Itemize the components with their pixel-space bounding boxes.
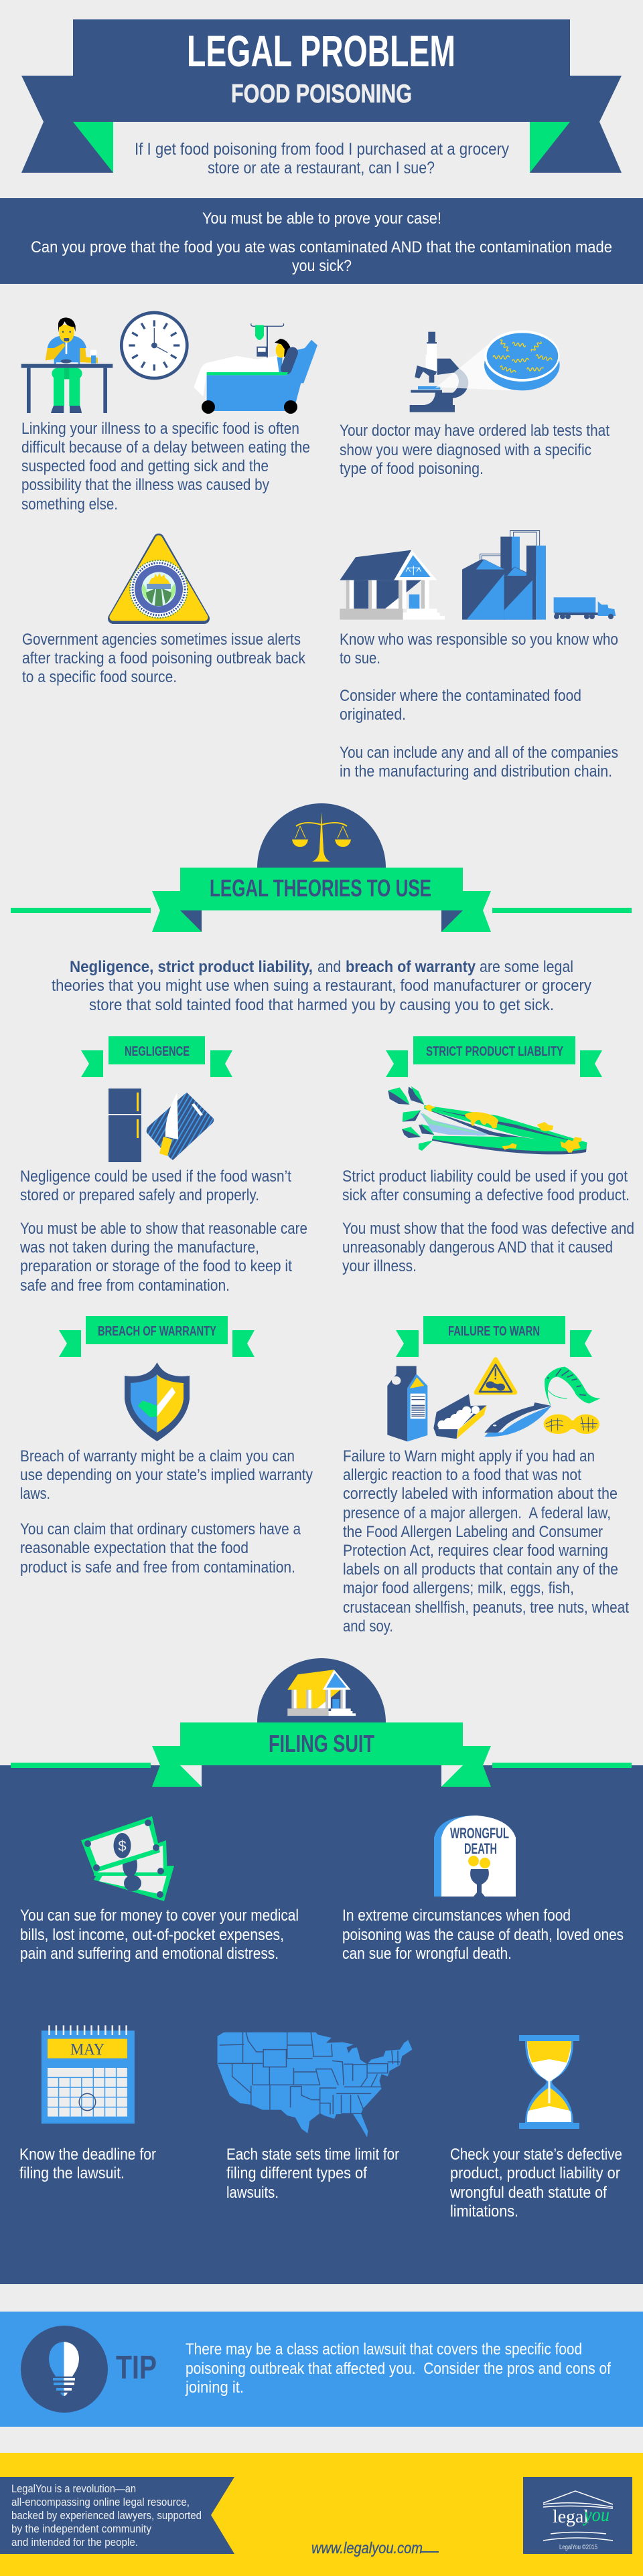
text: lab tests [340, 422, 610, 478]
icon: patient in hospital bed [194, 323, 317, 414]
website url: www.legalyou.com [311, 2539, 423, 2557]
section heading: filing suit [11, 1658, 632, 1787]
text: breach of warranty: use depending on your state’s implied warranty [20, 1466, 313, 1484]
icon: calendar [42, 2025, 135, 2123]
panel: prove your case: you sick? [292, 257, 352, 275]
text: negligence: safe and free from contamination. [20, 1277, 230, 1295]
icon: shield [125, 1362, 190, 1441]
icon: delivery truck [554, 597, 616, 619]
text: failure to warn: allergic reaction to a food that was not [343, 1466, 581, 1484]
ribbon: breach of warranty [59, 1316, 255, 1357]
text: linking illness: Linking your illness to a specific food is often [21, 420, 299, 438]
panel: tip [0, 2312, 643, 2427]
icon: milk carton [387, 1366, 427, 1441]
text: lab tests: type of food poisoning. [340, 460, 484, 478]
text: government alerts: Government agencies sometimes issue alerts [22, 631, 301, 649]
text: breach of warranty: Breach of warranty might be a claim you can [20, 1447, 295, 1465]
title banner [21, 19, 622, 173]
text: deadline: Know the deadline for [19, 2146, 156, 2164]
icon: money bills [81, 1816, 174, 1901]
about ribbon: by the independent community [11, 2522, 151, 2535]
legalyou logo [523, 2477, 632, 2554]
text: failure to warn: and soy. [343, 1617, 393, 1635]
about ribbon: LegalYou is a revolution—an [11, 2482, 136, 2495]
panel: prove your case [0, 198, 643, 284]
question text: store or ate a restaurant, can I sue? [208, 159, 435, 177]
icon: scales of justice [292, 812, 351, 862]
ribbon: strict product liability: STRICT PRODUCT LIABLITY [426, 1044, 563, 1059]
section heading: legal theories [11, 803, 632, 932]
text: know who was responsible: in the manufacturing and distribution chain. [340, 762, 612, 781]
text: wrongful death: can sue for wrongful death. [342, 1945, 512, 1963]
text: strict product liability [342, 1168, 634, 1275]
text: linking illness: possibility that the illness was caused by [21, 476, 269, 494]
text: deadline: filing the lawsuit. [19, 2164, 125, 2182]
text: strict product liability: your illness. [342, 1257, 417, 1275]
section heading: filing suit: FILING SUIT [269, 1730, 374, 1757]
icon: man eating at table [21, 317, 113, 413]
intro text: legal theories: Negligence, strict product liability, [70, 958, 313, 976]
text: breach of warranty: reasonable expectation that the food [20, 1539, 248, 1557]
text: wrongful death [342, 1907, 624, 1963]
text: wrongful death: In extreme circumstances when food [342, 1907, 571, 1925]
panel: prove your case: You must be able to prove your case! [202, 210, 441, 228]
intro text: legal theories: theories that you might use when suing a restaurant, food manufacturer or grocery [52, 977, 591, 995]
about ribbon: backed by experienced lawyers, supported [11, 2509, 202, 2522]
icon: fish [484, 1402, 551, 1437]
text: failure to warn: Protection Act, requires clear food warning [343, 1542, 608, 1560]
ribbon: strict product liability [386, 1036, 602, 1077]
text: state time limit: lawsuits. [226, 2184, 279, 2202]
icon: clock [121, 313, 187, 378]
text: linking illness [21, 420, 310, 513]
tip label: TIP [116, 2350, 157, 2386]
text: breach of warranty: product is safe and free from contamination. [20, 1558, 295, 1577]
text: sue for money [20, 1907, 299, 1963]
icon: wrongful death tombstone: DEATH [464, 1840, 497, 1857]
tip text [185, 2340, 611, 2397]
icon: government alert sign [113, 539, 204, 619]
intro text: legal theories: are some legal [480, 958, 573, 976]
intro text: legal theories: and [317, 958, 341, 976]
title: LEGAL PROBLEM [187, 26, 455, 76]
section heading: legal theories: LEGAL THEORIES TO USE [210, 874, 431, 902]
text: know who was responsible: to sue. [340, 649, 380, 667]
text: negligence: Negligence could be used if the food wasn’t [20, 1168, 291, 1186]
ribbon: negligence: NEGLIGENCE [125, 1044, 190, 1059]
text: government alerts: after tracking a food poisoning outbreak back [22, 649, 306, 667]
text: check statute [449, 2146, 622, 2221]
text: failure to warn: correctly labeled with information about the [343, 1485, 618, 1503]
icon: wrongful death tombstone [434, 1816, 516, 1897]
text: failure to warn: the Food Allergen Labeling and Consumer [343, 1523, 603, 1541]
text: negligence: preparation or storage of the food to keep it [20, 1257, 292, 1275]
icon: courthouse on dome [287, 1670, 356, 1716]
calendar month label: MAY [70, 2041, 104, 2059]
icon: peanut [544, 1415, 599, 1434]
icon: shrimp [545, 1367, 601, 1404]
text: government alerts [22, 631, 306, 686]
text: breach of warranty: laws. [20, 1485, 50, 1503]
text: sue for money: You can sue for money to cover your medical [20, 1907, 299, 1925]
text: lab tests: Your doctor may have ordered lab tests that [340, 422, 610, 440]
text: lab tests: show you were diagnosed with a specific [340, 441, 591, 459]
text: state time limit [226, 2146, 399, 2202]
text: sue for money: pain and suffering and emotional distress. [20, 1945, 279, 1963]
text: state time limit: filing different types of [226, 2164, 367, 2182]
question text [135, 140, 509, 177]
ribbon: failure to warn: FAILURE TO WARN [448, 1324, 540, 1339]
text: check statute: limitations. [450, 2202, 518, 2221]
icon: major food allergens [387, 1360, 601, 1441]
ribbon: failure to warn [396, 1316, 592, 1357]
text: failure to warn: major food allergens; milk, eggs, fish, [343, 1579, 574, 1597]
text: deadline [19, 2146, 156, 2182]
about ribbon [0, 2477, 234, 2554]
text: state time limit: Each state sets time limit for [226, 2146, 399, 2164]
legalyou logo: LegalYou ©2015 [559, 2544, 597, 2551]
ribbon: negligence [81, 1036, 232, 1077]
question text: If I get food poisoning from food I purchased at a grocery [135, 140, 509, 159]
intro text: legal theories: breach of warranty [346, 958, 476, 976]
text: linking illness: difficult because of a delay between eating the [21, 438, 310, 457]
legalyou logo: legal [553, 2506, 589, 2526]
icon: egg carton [433, 1394, 487, 1439]
text: failure to warn [343, 1447, 629, 1635]
icon: courthouse [340, 550, 445, 620]
icon: contaminated celery [388, 1086, 587, 1154]
text: check statute: product, product liability or [450, 2164, 620, 2182]
text: know who was responsible: Consider where the contaminated food [340, 687, 581, 705]
intro text: legal theories: store that sold tainted food that harmed you by causing you to get sick. [89, 996, 554, 1014]
icon: wrongful death tombstone: WRONGFUL [450, 1825, 509, 1842]
text: negligence [19, 1168, 307, 1295]
text: check statute: wrongful death statute of [449, 2184, 607, 2202]
tip text: joining it. [185, 2379, 244, 2397]
text: negligence: was not taken during the manufacture, [19, 1238, 259, 1257]
text: linking illness: suspected food and getting sick and the [21, 457, 269, 475]
text: know who was responsible: originated. [340, 706, 406, 724]
about ribbon: and intended for the people. [11, 2536, 138, 2549]
text: breach of warranty: You can claim that ordinary customers have a [20, 1520, 301, 1538]
icon: hourglass [519, 2035, 579, 2129]
intro text: legal theories [52, 958, 591, 1014]
about ribbon: all-encompassing online legal resource, [11, 2496, 190, 2508]
text: failure to warn: Failure to Warn might apply if you had an [343, 1447, 595, 1465]
icon: money bills: $ [118, 1838, 127, 1854]
text: know who was responsible [340, 631, 618, 781]
text: linking illness: something else. [21, 495, 118, 513]
icon: map of the United States [218, 2032, 412, 2138]
legalyou logo: you [582, 2504, 610, 2526]
text: breach of warranty [20, 1447, 313, 1577]
text: negligence: You must be able to show that reasonable care [20, 1220, 307, 1238]
icon: light bulb [49, 2342, 79, 2396]
icon: peanut warning sign [476, 1360, 515, 1392]
icon: microscope and petri dish [410, 330, 560, 412]
subtitle: FOOD POISONING [231, 80, 412, 108]
text: negligence: stored or prepared safely and properly. [20, 1186, 259, 1204]
tip text: There may be a class action lawsuit that covers the specific food [186, 2340, 582, 2358]
panel: filing suit background [0, 1765, 643, 2284]
text: sue for money: bills, lost income, out-of-pocket expenses, [20, 1926, 284, 1944]
ribbon: breach of warranty: BREACH OF WARRANTY [98, 1324, 216, 1339]
icon: refrigerator and cutting board [109, 1089, 214, 1162]
text: government alerts: to a specific food source. [22, 668, 177, 686]
icon: factory silos [462, 531, 546, 620]
footer [0, 2453, 643, 2576]
